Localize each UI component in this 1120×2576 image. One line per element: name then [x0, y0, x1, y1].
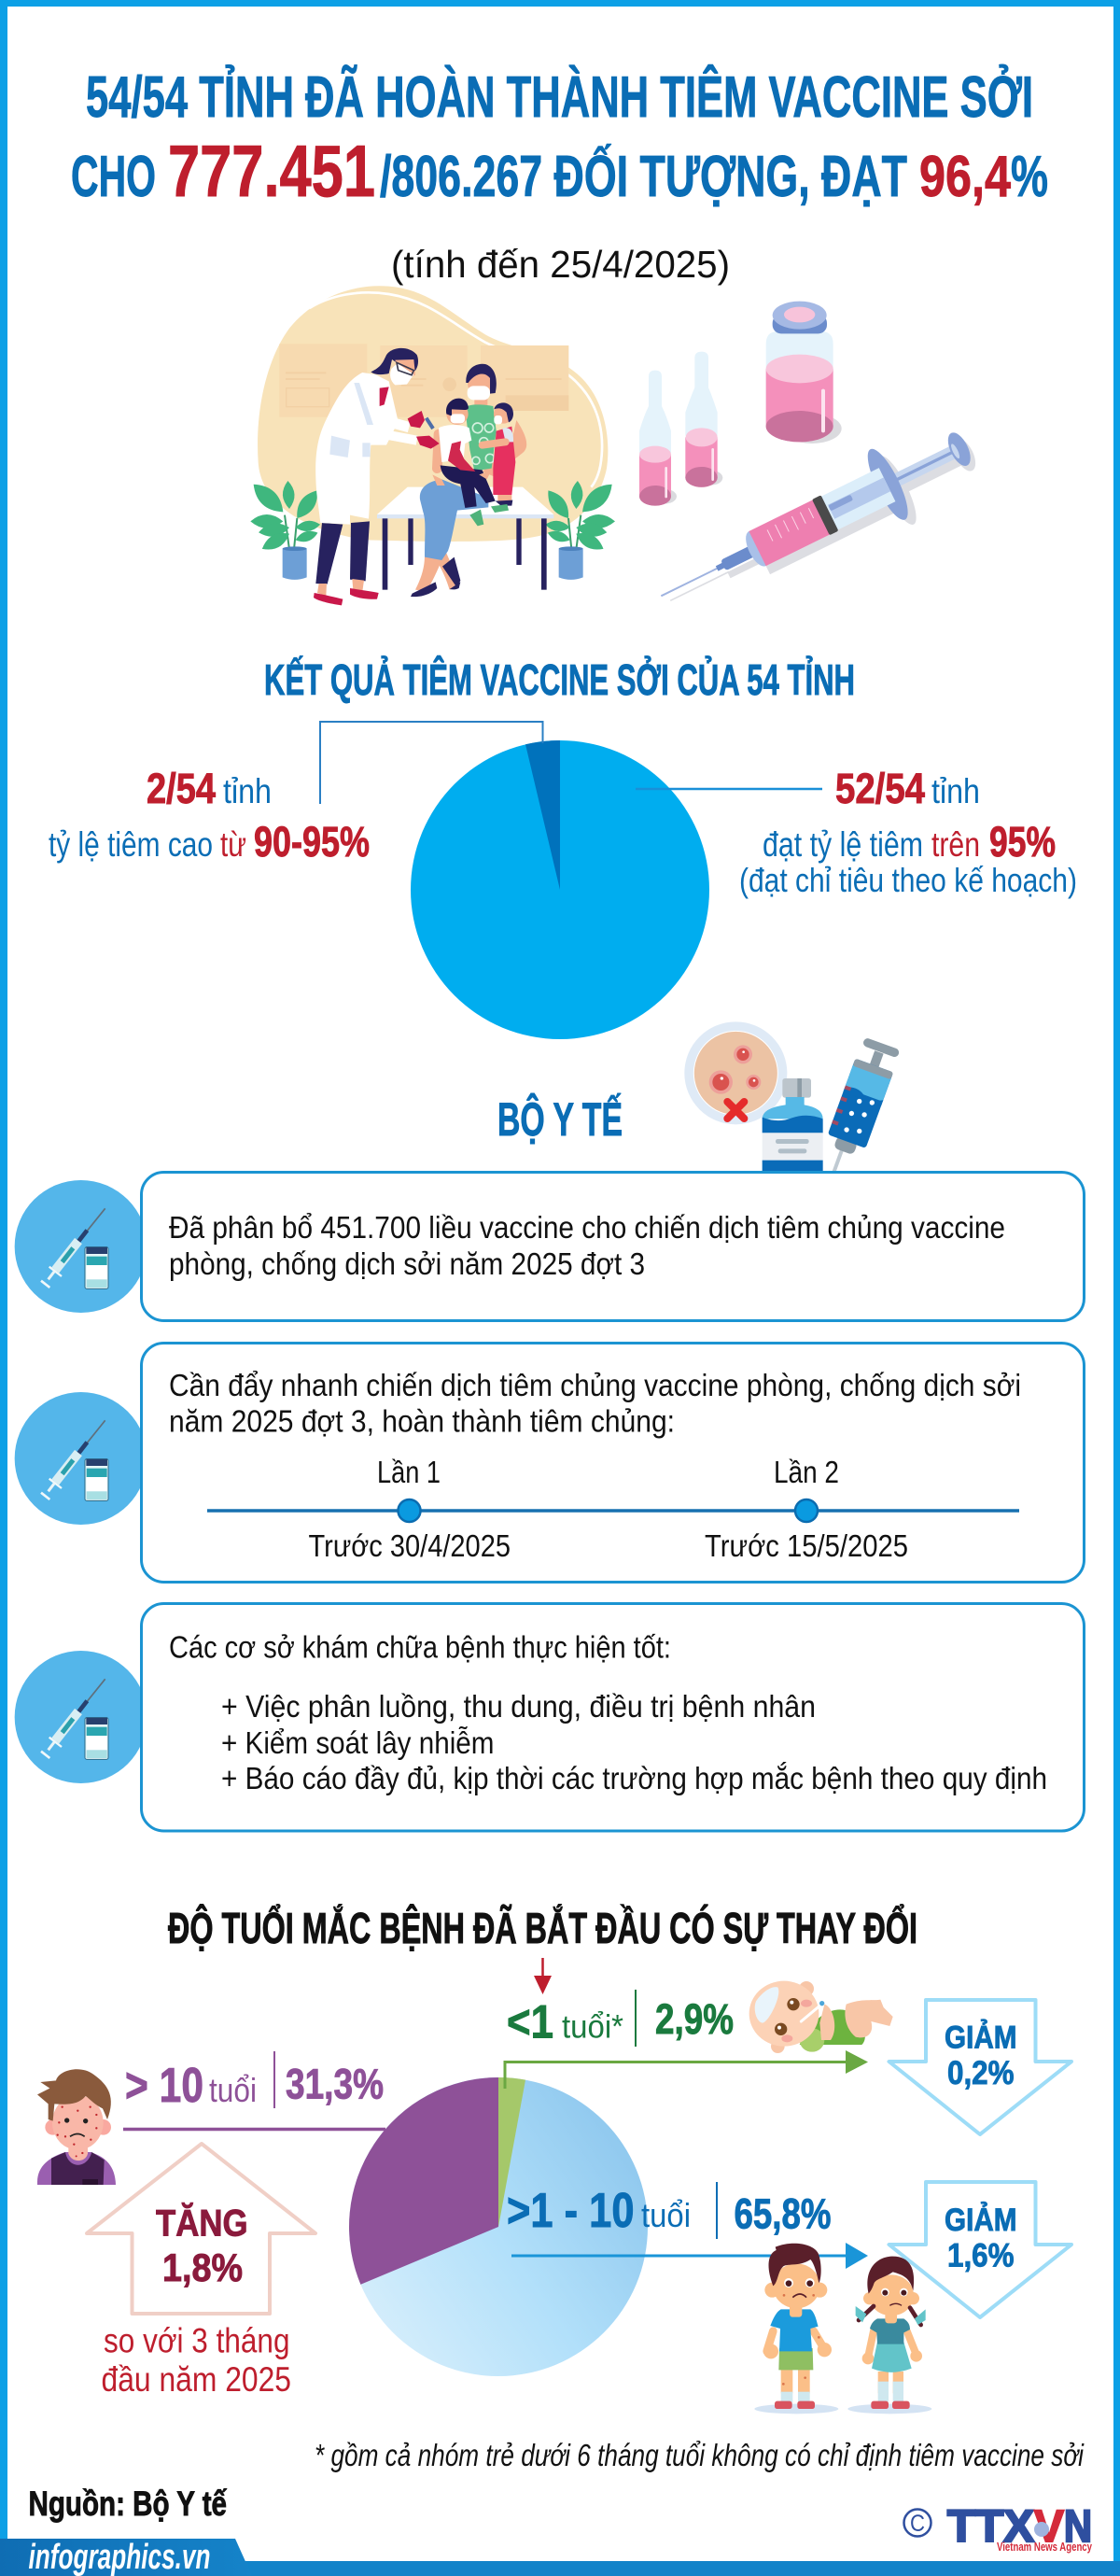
timeline: Lần 2 — [774, 1455, 839, 1489]
text: accelerate: năm 2025 đợt 3, hoàn thành tiêm chủng: — [169, 1404, 675, 1438]
callout: 2/54 provinces: từ — [220, 825, 246, 864]
note: comparison period: so với 3 tháng — [104, 2321, 289, 2360]
icon: skin rash, bottle, syringe — [684, 1021, 902, 1179]
title: % — [1011, 145, 1048, 209]
down arrow 2 — [889, 2182, 1071, 2317]
label: under 1 year: 2,9% — [655, 1995, 734, 2043]
title: 777.451 — [168, 130, 375, 212]
text: accelerate: Cần đẩy nhanh chiến dịch tiêm chủng vaccine phòng, chống dịch sởi — [169, 1368, 1021, 1402]
logo: TTXVN: C — [910, 2511, 925, 2537]
leader line: 2/54 — [320, 722, 543, 804]
callout: 52/54 provinces: đạt tỷ lệ tiêm — [763, 825, 923, 864]
down arrow 1 — [889, 2000, 1071, 2134]
text: doses — [169, 1210, 1005, 1281]
icon: vaccine circle 1 — [15, 1180, 147, 1313]
callout: increase arrow: TĂNG — [156, 2202, 248, 2245]
arrow: red down — [534, 1958, 552, 1994]
logo: TTXVN: N — [1064, 2502, 1092, 2552]
label: over 10 years — [125, 2051, 384, 2113]
icon: vaccine circle 2 — [15, 1392, 147, 1525]
timeline: Lần 1 — [377, 1455, 441, 1489]
callout: increase arrow — [87, 2144, 315, 2314]
callout: 52/54 provinces: trên — [931, 825, 980, 864]
icon: boy with measles — [37, 2069, 116, 2185]
section heading: Bộ Y tế: BỘ Y TẾ — [497, 1092, 623, 1146]
text: tasks: + Việc phân luồng, thu dung, điều trị bệnh nhân — [221, 1689, 816, 1724]
timeline: Trước 15/5/2025 — [705, 1528, 908, 1563]
label: over 10 years: 31,3% — [286, 2060, 384, 2108]
callout: 2/54 provinces: tỉnh — [223, 772, 272, 810]
callout: 2/54 provinces: 90-95% — [254, 818, 370, 866]
timeline: Trước 30/4/2025 — [308, 1528, 511, 1563]
website: infographics.vn — [28, 2538, 211, 2576]
text: accelerate — [169, 1368, 1021, 1438]
note: comparison period — [101, 2321, 291, 2399]
leader line: 52/54 — [636, 788, 822, 790]
timeline — [207, 1455, 1019, 1563]
callout: decrease 0.2% — [945, 2020, 1017, 2091]
panel: accelerate campaign timeline — [15, 1343, 1084, 1582]
callout: increase arrow: 1,8% — [162, 2245, 243, 2289]
callout: decrease 1.6%: 1,6% — [947, 2237, 1014, 2274]
title: CHO — [71, 145, 156, 209]
callout: 2/54 provinces: tỷ lệ tiêm cao — [49, 825, 213, 864]
source: Nguồn: Bộ Y tế — [28, 2485, 227, 2523]
icon: baby with thermometer — [749, 1981, 893, 2053]
pie chart: age groups — [349, 2077, 648, 2376]
green connector arrow — [505, 2050, 868, 2089]
title: 96,4 — [919, 145, 1011, 209]
footer bar — [0, 2538, 1120, 2576]
text: tasks: + Kiểm soát lây nhiễm — [221, 1725, 495, 1760]
label: 1 to 10 years: 65,8% — [734, 2190, 831, 2237]
illustration: doctor vaccinating child — [247, 286, 618, 605]
logo: TTXVN: V — [1034, 2502, 1064, 2552]
text: tasks — [169, 1630, 1047, 1795]
callout: 52/54 provinces: 95% — [989, 818, 1056, 866]
logo: TTXVN: TTX — [947, 2502, 1034, 2552]
section heading: results: KẾT QUẢ TIÊM VACCINE SỞI CỦA 54 TỈNH — [264, 655, 855, 704]
panel: hospitals tasks — [15, 1604, 1084, 1831]
logo: TTXVN — [903, 2502, 1093, 2554]
text: doses: Đã phân bổ 451.700 liều vaccine cho chiến dịch tiêm chủng vaccine — [169, 1210, 1005, 1245]
callout: 52/54 provinces — [739, 765, 1077, 899]
label: under 1 year: <1 — [507, 1996, 553, 2048]
label: over 10 years: > 10 — [125, 2059, 203, 2113]
label: over 10 years: tuổi — [209, 2071, 257, 2109]
callout: 2/54 provinces: 2/54 — [147, 765, 216, 812]
illustration: vials and syringe — [639, 302, 990, 639]
purple connector — [123, 2128, 385, 2131]
callout: decrease 1.6% — [945, 2203, 1017, 2274]
pie chart: 54 provinces — [411, 740, 709, 1039]
label: 1 to 10 years — [507, 2182, 831, 2239]
label: under 1 year — [507, 1990, 734, 2048]
callout: decrease 0.2%: GIẢM — [945, 2020, 1017, 2056]
note: comparison period: đầu năm 2025 — [101, 2360, 291, 2399]
text: doses: phòng, chống dịch sởi năm 2025 đợt 3 — [169, 1246, 645, 1281]
panel: vaccine doses allocated — [15, 1173, 1084, 1320]
icon: boy and girl with measles — [754, 2244, 931, 2414]
blue connector arrow — [511, 2243, 868, 2269]
text: tasks: Các cơ sở khám chữa bệnh thực hiện tốt: — [169, 1630, 671, 1664]
label: 1 to 10 years: >1 - 10 — [507, 2184, 635, 2238]
callout: 52/54 provinces: tỉnh — [931, 772, 980, 810]
title: /806.267 ĐỐI TƯỢNG, ĐẠT — [380, 145, 907, 209]
callout: 52/54 provinces: 52/54 — [835, 765, 925, 812]
label: under 1 year: tuổi* — [562, 2009, 623, 2045]
label: 1 to 10 years: tuổi — [641, 2196, 691, 2234]
callout: 2/54 provinces — [49, 765, 370, 866]
callout: decrease 0.2%: 0,2% — [947, 2055, 1014, 2091]
callout: decrease 1.6%: GIẢM — [945, 2203, 1017, 2238]
title — [71, 65, 1048, 212]
date subtitle: (tính đến 25/4/2025) — [391, 243, 730, 286]
text: tasks: + Báo cáo đầy đủ, kịp thời các trường hợp mắc bệnh theo quy định — [221, 1761, 1047, 1795]
icon: vaccine circle 3 — [15, 1651, 147, 1783]
